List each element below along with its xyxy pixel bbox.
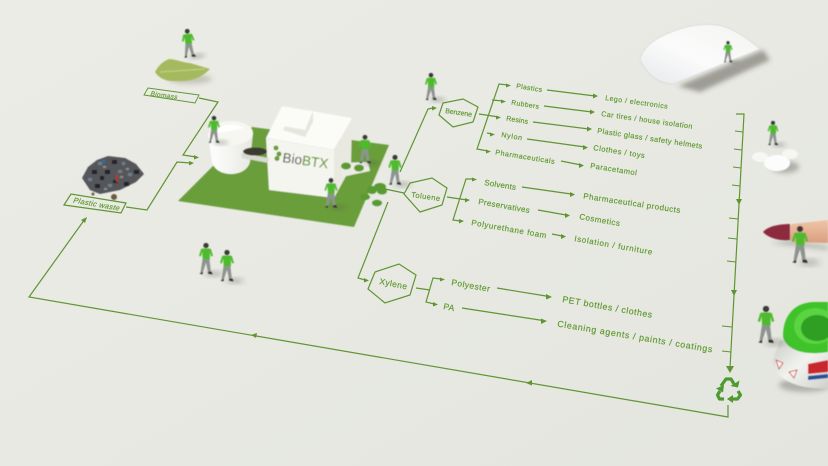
text: Polyester: Polyester <box>451 277 491 294</box>
text: Clothes / toys: Clothes / toys <box>593 143 646 160</box>
label: Biomass <box>144 88 199 103</box>
hexagon label: Xylene: Xylene <box>379 276 408 291</box>
biomass connector <box>183 98 218 157</box>
text: Resins: Resins <box>506 116 529 126</box>
worker on tank <box>208 116 228 144</box>
worker in front of building <box>325 178 347 210</box>
plastic waste pile <box>82 156 144 200</box>
worker pair right <box>220 250 244 283</box>
plastic waste connector <box>126 162 191 210</box>
text: Pharmaceuticals: Pharmaceuticals <box>495 148 556 166</box>
worker beside building <box>359 135 380 165</box>
Xylene arrowheads <box>433 278 445 306</box>
worker figures <box>181 27 820 345</box>
Toluene arrowheads <box>459 178 477 224</box>
leaf <box>155 59 212 84</box>
text: Plastic glass / safety helmets: Plastic glass / safety helmets <box>597 126 703 151</box>
Toluene branching lines <box>447 179 474 221</box>
illustration layer <box>82 24 828 392</box>
Benzene branching lines <box>477 84 508 151</box>
product arrowheads <box>541 294 552 324</box>
building roof <box>266 106 352 150</box>
roof block <box>283 108 313 137</box>
text: Lego / electronics: Lego / electronics <box>605 95 669 111</box>
arrowheads on main lines <box>81 106 742 386</box>
logo dots <box>274 146 282 161</box>
product arrowheads <box>561 192 575 239</box>
worker by leaf <box>181 27 205 59</box>
label: Plastic waste: Plastic waste <box>72 196 122 213</box>
text: Preservatives: Preservatives <box>478 197 530 215</box>
worker at lipstick <box>792 226 820 265</box>
logo text: BioBTX <box>282 150 329 171</box>
hexagon label: Benzene: Benzene <box>445 108 473 119</box>
pile of green discs <box>360 183 387 206</box>
table with green discs <box>341 162 370 177</box>
text: Nylon: Nylon <box>501 130 523 142</box>
factory building <box>266 106 352 198</box>
Benzene arrowheads <box>486 84 511 154</box>
worker on mouse <box>724 41 739 64</box>
worker with pills <box>768 121 786 146</box>
computer mouse <box>640 24 770 92</box>
collector ticks <box>722 131 743 352</box>
icon: recycling symbol <box>716 379 740 403</box>
recycling return loop <box>29 219 728 417</box>
worker pair left <box>199 243 222 276</box>
Xylene branching lines <box>416 278 441 304</box>
text: Pharmaceutical products: Pharmaceutical products <box>583 192 681 215</box>
text: Plastics: Plastics <box>516 83 543 94</box>
roof block top <box>283 108 313 130</box>
hexagon label: Toluene: Toluene <box>411 190 441 203</box>
product arrowheads <box>579 94 598 168</box>
product arrows <box>522 187 571 236</box>
label: Biomass: Biomass <box>149 91 179 101</box>
text: Paracetamol: Paracetamol <box>590 161 638 177</box>
Xylene group <box>368 264 714 354</box>
text: Car tires / house isolation: Car tires / house isolation <box>601 109 693 131</box>
finger with lipstick nail <box>763 220 828 250</box>
Benzene group <box>439 83 703 177</box>
text: PA: PA <box>443 301 456 313</box>
worker near benzene <box>425 73 445 102</box>
pills <box>752 149 799 173</box>
toluene side connector <box>385 189 404 193</box>
text: Isolation / furniture: Isolation / furniture <box>574 234 654 257</box>
hexagon: Benzene <box>439 99 478 127</box>
toluene feed line <box>358 202 388 280</box>
text: PET bottles / clothes: PET bottles / clothes <box>562 294 654 320</box>
storage tank <box>208 121 253 174</box>
text: Cleaning agents / paints / coatings: Cleaning agents / paints / coatings <box>557 319 714 354</box>
paint jar <box>772 302 828 392</box>
hexagon: Toluene <box>404 178 447 212</box>
text: Cosmetics: Cosmetics <box>579 212 621 228</box>
text: Solvents: Solvents <box>484 178 517 192</box>
building front <box>266 138 334 198</box>
worker carrying box <box>389 155 411 186</box>
green mat <box>178 127 389 227</box>
worker at jar <box>758 306 786 345</box>
product arrows <box>462 288 549 320</box>
text: Rubbers: Rubbers <box>511 100 540 111</box>
hexagon: Xylene <box>368 264 416 303</box>
collector line on right <box>730 114 744 368</box>
text: Polyurethane foam: Polyurethane foam <box>471 218 547 240</box>
flow diagram lines <box>29 98 744 417</box>
building shadow side <box>334 118 352 198</box>
benzene feed line <box>400 108 433 172</box>
product arrows <box>527 90 595 165</box>
conveyor with plastic <box>241 148 269 163</box>
Toluene group <box>404 178 681 257</box>
